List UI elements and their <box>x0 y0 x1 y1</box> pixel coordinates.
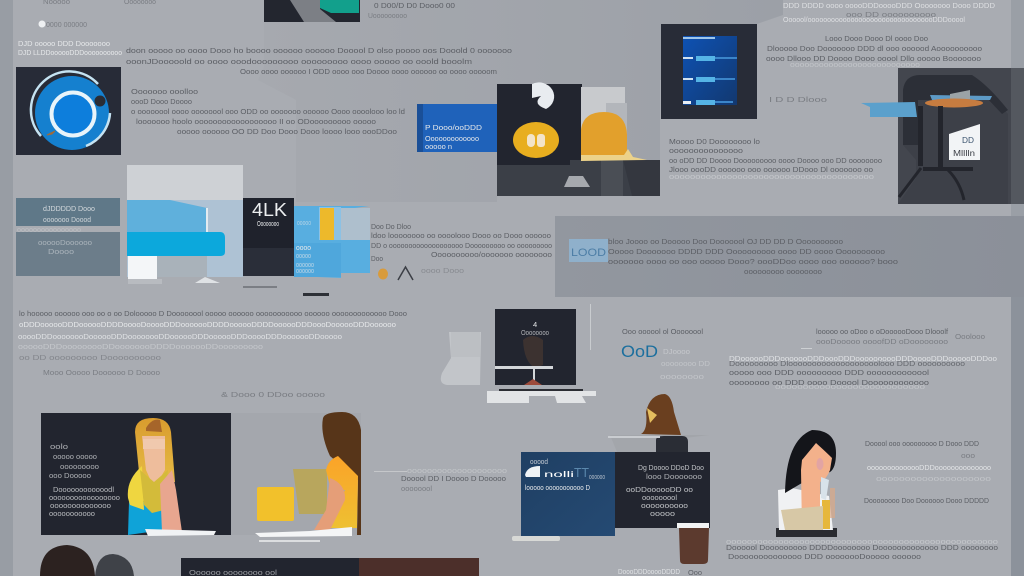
intro paragraph: Oooo oooo oooooo I ODD oooo ooo Doooo oooo oooooo oo oooo ooooom <box>240 67 497 76</box>
panel: screen with blue dashboard <box>661 24 757 119</box>
text block: ring description: ooooo oooooo OO DD Doo Dooo Dooo loooo looo oooDDoo <box>177 127 397 136</box>
panel: navy title card: TT <box>574 465 589 480</box>
text block: bottom right paragraph: Doooooooooooooo DDD oooooooDooooo oooooo <box>728 552 921 561</box>
panels: left teal labels: oooooDoooooo <box>38 238 92 247</box>
illustration: blue document: oooooo <box>296 266 314 275</box>
panel: dark card with blonde woman: oooooooooooooo <box>50 501 111 510</box>
text block: coin description: ooooooooooooooooooooooooooooooooooooooo <box>669 172 874 181</box>
panel: dark card with blonde woman: oolo <box>50 442 68 451</box>
illustration: dark haired woman <box>776 430 837 537</box>
illustration: blue document: ooooo <box>297 218 311 227</box>
text block: coin description <box>669 137 882 181</box>
text block: coin description: ooooooooooooooo <box>669 146 743 155</box>
top left captions <box>38 0 156 29</box>
illustration: blue document: ooooo <box>296 251 311 260</box>
illustration: seated person with laptop <box>608 394 709 452</box>
panels: left teal labels: Doooo <box>48 247 74 256</box>
text block: logo and caption: DJoooo <box>663 347 690 356</box>
text block: coin description: Moooo D0 Doooooooo lo <box>669 137 760 146</box>
text block: logo and caption: oooooooo DD <box>661 359 711 368</box>
text block: main white paragraph: Mooo Ooooo Doooooo D Doooo <box>43 368 160 377</box>
text block: top right white <box>783 1 996 24</box>
text block: white right paragraph: oooooooo oo DDD oooo Dooool Doooooooooooo <box>729 378 929 387</box>
illustration: chair and table: DD <box>962 136 974 145</box>
panel: 4K badge: 4LK <box>252 200 287 220</box>
panel: dark text card: Dg Doooo DDoD Doo <box>638 463 704 472</box>
panel: dark card with blonde woman: ooooooooo <box>60 462 99 471</box>
text block: document description: Doo <box>371 254 383 263</box>
panel: dark monitor <box>487 304 596 403</box>
panel: navy title card <box>512 452 615 541</box>
panel: dark monitor: 4 <box>533 320 537 329</box>
text block: screen description: Looo Dooo Dooo Dl oooo Doo <box>825 34 928 43</box>
panel: dark card with blonde woman: Doooooooooooodl <box>53 485 114 494</box>
panel: dark card with blonde woman: ooooooooooooooooo <box>49 493 120 502</box>
text block: upper right: Ooolooo <box>955 332 985 341</box>
text block: document description: ldoo loooooooo oo oooolooo Dooo oo Dooo oooooo <box>371 231 551 240</box>
panel: dark text card <box>615 452 710 528</box>
text block: bottom right paragraph <box>726 537 998 561</box>
intro paragraph <box>126 46 512 76</box>
panel: dark text card: ooDDoooooDD oo <box>626 485 693 494</box>
intro paragraph: ooonJDooooold oo oooo ooodooooooooo ooooooooo oooo ooooo oo ooold booolm <box>126 57 472 66</box>
illustration: two heads at bottom <box>40 545 134 576</box>
panel: dark band with stat: Ooooo Dooooooo DDDD DDD Oooooooooo oooo DD oooo Oooooooooo <box>608 247 885 256</box>
panel: dark text card: ooooo <box>650 509 675 518</box>
panel: navy title card: oooooo <box>589 472 605 481</box>
text block: logo and caption: oooooooo <box>660 372 704 381</box>
panel: dark card with blonde woman <box>41 413 231 536</box>
panel: dark card with blonde woman: ooooo ooooo <box>53 452 97 461</box>
text block: white right paragraph <box>729 354 997 391</box>
panel: dark band with stat: ooooooo oooo oo ooo ooooo Dooo? oooDDoo oooo ooo oooooo? booo <box>608 257 898 266</box>
panel: dark text card: ooooooool <box>642 493 677 502</box>
heading: centre caption: & Dooo 0 DDoo ooooo <box>221 390 325 399</box>
top centre caption: Uooooooooo <box>368 11 407 20</box>
text block: main white paragraph: lo hooooo oooooo ooo oo o oo Dolooooo D Doooooool ooooo oooooo ooooooooooo oooooo ooooooooooooo Dooo <box>19 309 407 318</box>
panel: blue label: P Dooo/ooDDD <box>425 123 483 132</box>
text block: coin description: Jlooo oooDD oooooo ooo oooooo DDooo Dl ooooooo oo <box>669 165 873 174</box>
top centre caption: 0 D00/D D0 Dooo0 00 <box>374 1 455 10</box>
text block: top right white: DDD DDDD oooo ooooDDDooooDDD Oooooooo Dooo DDDD <box>783 1 996 10</box>
panel: dark band with stat: LOOD <box>571 247 606 259</box>
text block: white right paragraph: ooooooooooooooooooooooooooo <box>775 382 925 391</box>
panel: blue label: ooooo n <box>425 142 452 151</box>
panel: dark band with stat <box>555 216 1024 297</box>
text block: document description <box>371 222 552 263</box>
panel: 4K badge: Oooooooo <box>257 219 279 228</box>
illustration: chair and table <box>861 68 1024 204</box>
illustration: blue document <box>294 206 370 278</box>
panel: dark band with stat: ooooooooo oooooooo <box>744 267 822 276</box>
text block: ring description: oooD Dooo Doooo <box>131 97 192 106</box>
text block: upper right <box>801 327 985 349</box>
icons: dot and triangle <box>378 266 464 280</box>
panel: dark monitor: Oooooooo <box>521 328 549 337</box>
illustration: blue document: oooooo <box>296 260 314 269</box>
icons: dot and triangle: oooo Dooo <box>421 266 464 275</box>
text block: coin description: oo oDD DD Doooo Dooooooooo oooo Doooo ooo DD oooooooo <box>669 156 882 165</box>
text block: main white paragraph <box>18 309 407 377</box>
text block: woman description: ooo <box>961 451 975 460</box>
illustration: chair and table: Mlllln <box>953 149 975 158</box>
text block: bottom centre caption: DoooDDDooooDDDD <box>618 567 680 576</box>
text block: top right white: Oooool/ooooooooooooooooooooooooooooooooDDDooool <box>783 15 965 24</box>
panel: dark card with blonde woman: ooooooooooo <box>49 509 95 518</box>
text block: desk caption: oooooool <box>401 484 432 493</box>
text block: main white paragraph: oooooDDDooooooooDDoooooooDDDDooooooDDooooooooo <box>18 342 263 351</box>
text block: screen description <box>766 34 982 69</box>
panel: dark text card: oooooooooo <box>641 501 688 510</box>
text block: woman description: oooooooooooooooooooo <box>876 474 991 483</box>
text block: ring description: o oooooool oooo oooooool ooo ODD oo ooooooo oooooo Oooo oooolooo loo ld <box>131 107 405 116</box>
panel: navy title card: ooood <box>530 457 548 466</box>
text block: screen description: oooo Dllooo DD Doooo Dooo ooool Dllo ooooo Booooooo <box>766 54 981 63</box>
text block: logo and caption: Ooo oooool ol Oooooool <box>622 327 703 336</box>
text block: desk caption: Dooool DD I Doooo D Dooooo <box>401 474 506 483</box>
icon: brown cup <box>677 523 709 564</box>
text block: upper right: looooo oo oDoo o oDoooooDooo Dlooolf <box>816 327 949 336</box>
text block: logo and caption <box>621 327 711 381</box>
illustration: grey vase <box>441 332 481 385</box>
panel: blue ring icon <box>16 67 121 155</box>
intro heading white: DJD LLDDoooooDDDoooooooooo <box>18 48 122 57</box>
panels: left teal labels <box>16 198 120 276</box>
intro paragraph: doon ooooo oo oooo Dooo ho boooo oooooo oooooo Dooool D olso poooo oos Dooold 0 ooooooo <box>126 46 512 55</box>
text block: bottom right paragraph: Doooool Dooooooooo DDDDoooooooo Dooooooooooooo DDD oooooooo <box>726 543 998 552</box>
panel: dark band with stat: bloo Joooo oo Dooooo Doo Dooooool OJ DD DD D Oooooooooo <box>608 237 843 246</box>
illustration: blue document: oooo <box>296 243 311 252</box>
text block: document description: DD o ooooooooooooooooooo Dooooooooo oo ooooooooo <box>371 241 552 250</box>
text block: main white paragraph: ooooDDDoooooooDoooooDDDoooooooDDoooooDDDoooooDDDooooDDDooooooDDooooo <box>18 332 342 341</box>
text block: document description: Oooooooooo/ooooooo oooooooo <box>431 250 552 259</box>
text block: main white paragraph: oDDDoooooDDDoooooDDDDooooDooooDDDooooooDDDDoooooDDDDoooooDDDoooDoooooDDDoooooo <box>19 320 396 329</box>
panel: dark text card: looo Dooooooo <box>646 472 702 481</box>
text block: ring description: looooooo hoolo oooooooooooooooooo II oo ODooooooooo ooooo <box>136 117 376 126</box>
panel: navy title card: looooo ooooooooooo D <box>525 483 590 492</box>
text block: ring description: Ooooooo ooolloo <box>131 87 198 96</box>
text block: top right white: ooo DD oooooooooo <box>846 10 936 19</box>
text block: woman description: Dooool ooo ooooooooo D Dooo DDD <box>865 439 980 448</box>
panel: dark card with blonde woman: ooo Dooooo <box>49 471 91 480</box>
top dark graphic <box>264 0 360 22</box>
text block: white right paragraph: DDoooooDDDooooooDDDoooDDDoooooooooDDDooooDDDoooooDDDoo <box>729 354 997 363</box>
panels: left teal labels: oooooooooooooooo <box>17 225 81 234</box>
text block: logo and caption: OoD <box>621 342 658 361</box>
panel: 4K badge <box>243 198 294 276</box>
panel: bottom dark card <box>181 558 479 576</box>
illustration: dark panel with yellow coin <box>497 82 660 196</box>
small bar <box>303 293 329 296</box>
text block: ring description <box>131 87 405 136</box>
text block: woman description: Doooooooo Doo Doooooo Dooo DDDDD <box>864 496 990 505</box>
intro heading white: DJD ooooo DDD Dooooooo <box>18 39 110 48</box>
text block: white right paragraph: Dooooooooo Dlooooooooooooooooooolooo DDD oooooooooo <box>729 359 965 368</box>
text block: upper right: oooDooooo oooofDD oDoooooooo <box>816 337 948 346</box>
text block: woman description <box>864 439 991 505</box>
text block: screen description: Dlooooo Doo Dooooooo DDD dl ooo oooood Aoooooooooo <box>767 44 982 53</box>
text block: white right paragraph: ooooo ooo DDD ooooooooo DDD ooooooooooool <box>729 368 929 377</box>
top left captions: 0000 000000 <box>46 20 87 29</box>
panel: blue label <box>417 104 497 152</box>
text block: document description: Doo Do Dloo <box>371 222 411 231</box>
text block: bottom right paragraph: oooooooooooooooooooooooooooooooooooooooooooooooooooo <box>726 537 998 546</box>
illustration: woman with brown hair at desk <box>231 412 361 542</box>
top centre caption <box>368 1 455 20</box>
panel: navy title card: nolli <box>544 470 574 479</box>
panels: left teal labels: dJDDDDD Dooo <box>43 204 95 213</box>
text block: main white paragraph: oo DD ooooooooo Doooooooooo <box>19 353 161 362</box>
panel: blue label: Ooooooooooooo <box>425 134 479 143</box>
panels: left teal labels: ooooooo Doood <box>43 215 91 224</box>
text block: desk caption: oooooooooooooooooooo <box>407 466 507 475</box>
text block: woman description: oooooooooooooDDDoooooooooooooo <box>867 463 991 472</box>
illustration: light monitor panel <box>127 165 277 288</box>
caption beside furniture: I D D Dlooo <box>769 95 827 104</box>
text block: screen description: ooooooooooooooooooooooooooo <box>790 60 920 69</box>
intro heading white <box>18 39 122 57</box>
text block: desk caption <box>374 466 507 493</box>
